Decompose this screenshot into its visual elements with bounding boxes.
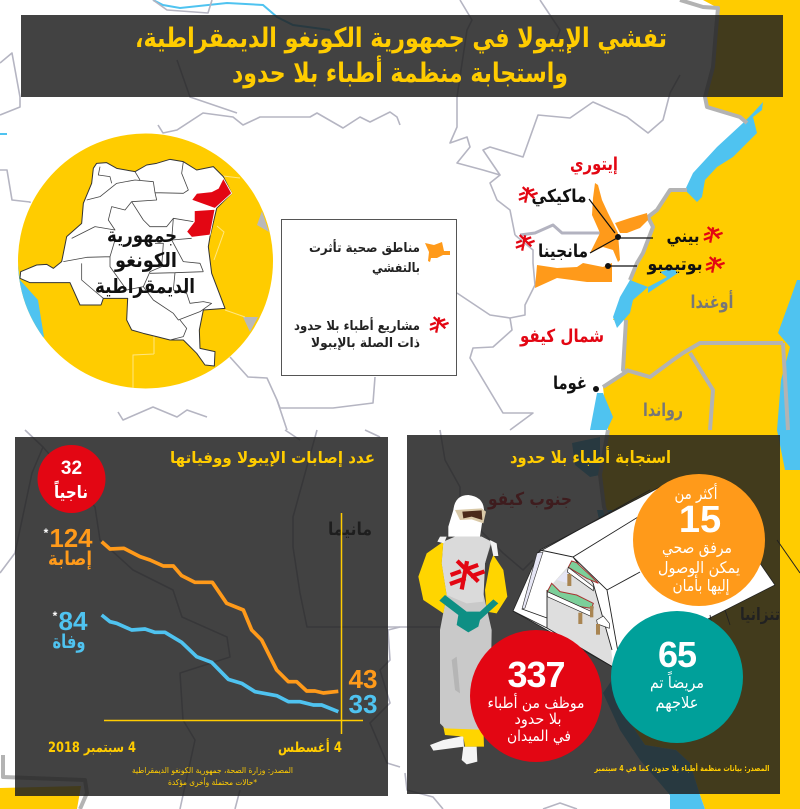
stat: health facilities: يمكن الوصول — [658, 558, 740, 578]
illustration: health worker — [418, 495, 507, 764]
orange affected zones — [535, 183, 648, 288]
axes — [104, 513, 363, 734]
stat: MSF staff: في الميدان — [507, 727, 571, 746]
locator circle: DRC — [10, 134, 273, 390]
survivors badge — [38, 445, 106, 513]
line: deaths — [102, 615, 338, 712]
value: 84 deaths: وفاة — [52, 631, 86, 653]
value: 84 deaths — [52, 606, 88, 653]
legend icon: orange area — [425, 242, 450, 262]
value: 124 cases — [44, 523, 93, 570]
legend icon: MSF — [426, 313, 450, 334]
date: start: 4 سبتمبر 2018 — [48, 740, 136, 756]
value: 43: 43 — [348, 664, 378, 694]
DRC outline — [20, 159, 232, 366]
legend text: MSF projects: مشاريع أطباء بلا حدود — [294, 317, 420, 334]
MSF logo on chest — [443, 553, 488, 593]
label: Beni: بيني — [666, 226, 700, 247]
stat: MSF staff — [470, 630, 602, 762]
icon: MSF Makeke — [515, 183, 539, 204]
title panel — [21, 15, 783, 97]
tent beds — [547, 561, 609, 635]
value: 124 cases: 124 — [50, 523, 93, 553]
label: Makeke: ماكيكي — [532, 186, 586, 207]
stat: patients treated: علاجهم — [656, 693, 698, 713]
legend: ذات الصلة بالإيبولا — [311, 336, 420, 351]
label: Ituri: إيتوري — [570, 154, 618, 175]
thin provincial borders — [0, 53, 20, 115]
icon: MSF Butembo — [702, 253, 726, 274]
panel: MSF response — [407, 435, 780, 794]
source note: المصدر: بيانات منظمة أطباء بلا حدود، كما في 4 سبتمبر — [594, 763, 770, 773]
label: North Kivu: شمال كيفو — [519, 326, 604, 347]
icon: MSF Mangina — [512, 231, 536, 252]
circle label line 1: جمهورية — [107, 223, 177, 247]
label: Tanzania: تنزانيا — [740, 605, 780, 625]
trousers — [443, 727, 484, 747]
value: 124 cases: * — [44, 526, 49, 540]
stat: health facilities: 15 — [679, 499, 721, 541]
source note: المصدر: وزارة الصحة، جمهورية الكونغو الديمقراطية — [132, 766, 293, 775]
stat: MSF staff: بلا حدود — [514, 710, 562, 728]
affected provinces in red — [187, 178, 232, 237]
label: Butembo: بوتيمبو — [647, 254, 702, 275]
illustration: tent — [513, 487, 775, 667]
stat: patients treated: 65 — [658, 634, 697, 675]
title line 1: تفشي الإيبولا في جمهورية الكونغو الديمقراطية، — [135, 23, 667, 54]
legend text: affected health zones: مناطق صحية تأثرت — [309, 239, 420, 256]
value: 124 cases: إصابة — [48, 548, 92, 570]
response heading: استجابة أطباء بلا حدود — [510, 446, 671, 468]
stat: patients treated — [611, 611, 743, 743]
icon: MSF Beni — [700, 223, 724, 244]
gray and blue neighbours — [243, 211, 269, 332]
stat: health facilities: إليها بأمان — [672, 574, 730, 596]
sleeves — [418, 542, 507, 613]
survivors badge: 32 — [61, 458, 82, 479]
circle label line 2: الكونغو — [114, 248, 177, 272]
value: 84 deaths: 84 — [58, 606, 88, 636]
legend: بالتفشي — [372, 261, 420, 276]
hood and mask — [448, 495, 484, 537]
label: Uganda: أوغندا — [690, 290, 734, 313]
date: end: 4 أغسطس — [278, 738, 342, 756]
stat: MSF staff: 337 — [507, 654, 565, 695]
label: Rwanda: رواندا — [643, 400, 683, 421]
label: South Kivu: جنوب كيفو — [487, 489, 572, 510]
lakes — [572, 102, 800, 809]
stat: health facilities: أكثر من — [674, 483, 718, 504]
stat: patients treated: مريضاً تم — [650, 670, 704, 693]
stat: MSF staff: موظف من أطباء — [488, 693, 584, 712]
circle label line 3: الديمقراطية — [95, 274, 195, 298]
gloves — [439, 595, 498, 632]
chart heading: عدد إصابات الإيبولا ووفياتها — [170, 448, 375, 467]
stat: health facilities: مرفق صحي — [662, 538, 732, 558]
legend — [282, 220, 456, 376]
label: Maniema: مانيما — [328, 519, 372, 540]
gown — [440, 537, 492, 730]
boots — [430, 736, 477, 764]
thick international borders — [680, 0, 747, 123]
Ituri / North Kivu border — [520, 225, 613, 235]
value: 84 deaths: * — [53, 609, 58, 623]
source note: *حالات محتملة وأخرى مؤكدة — [168, 777, 257, 787]
label: Goma: غوما — [553, 373, 587, 394]
survivors badge: ناجياً — [54, 479, 88, 503]
town dots — [615, 234, 621, 240]
title line 2: واستجابة منظمة أطباء بلا حدود — [232, 55, 568, 89]
river — [153, 0, 330, 30]
stat: health facilities — [633, 474, 765, 606]
map labels under panels — [328, 489, 780, 625]
source note — [132, 766, 293, 787]
detail map: outbreak areas — [512, 154, 734, 421]
value: 33: 33 — [348, 689, 378, 719]
line: cases — [102, 542, 338, 693]
leader lines — [589, 199, 653, 266]
label: Mangina: مانجينا — [538, 241, 588, 262]
neighbouring countries in yellow — [600, 0, 800, 809]
panel: cases and deaths chart — [15, 437, 388, 796]
